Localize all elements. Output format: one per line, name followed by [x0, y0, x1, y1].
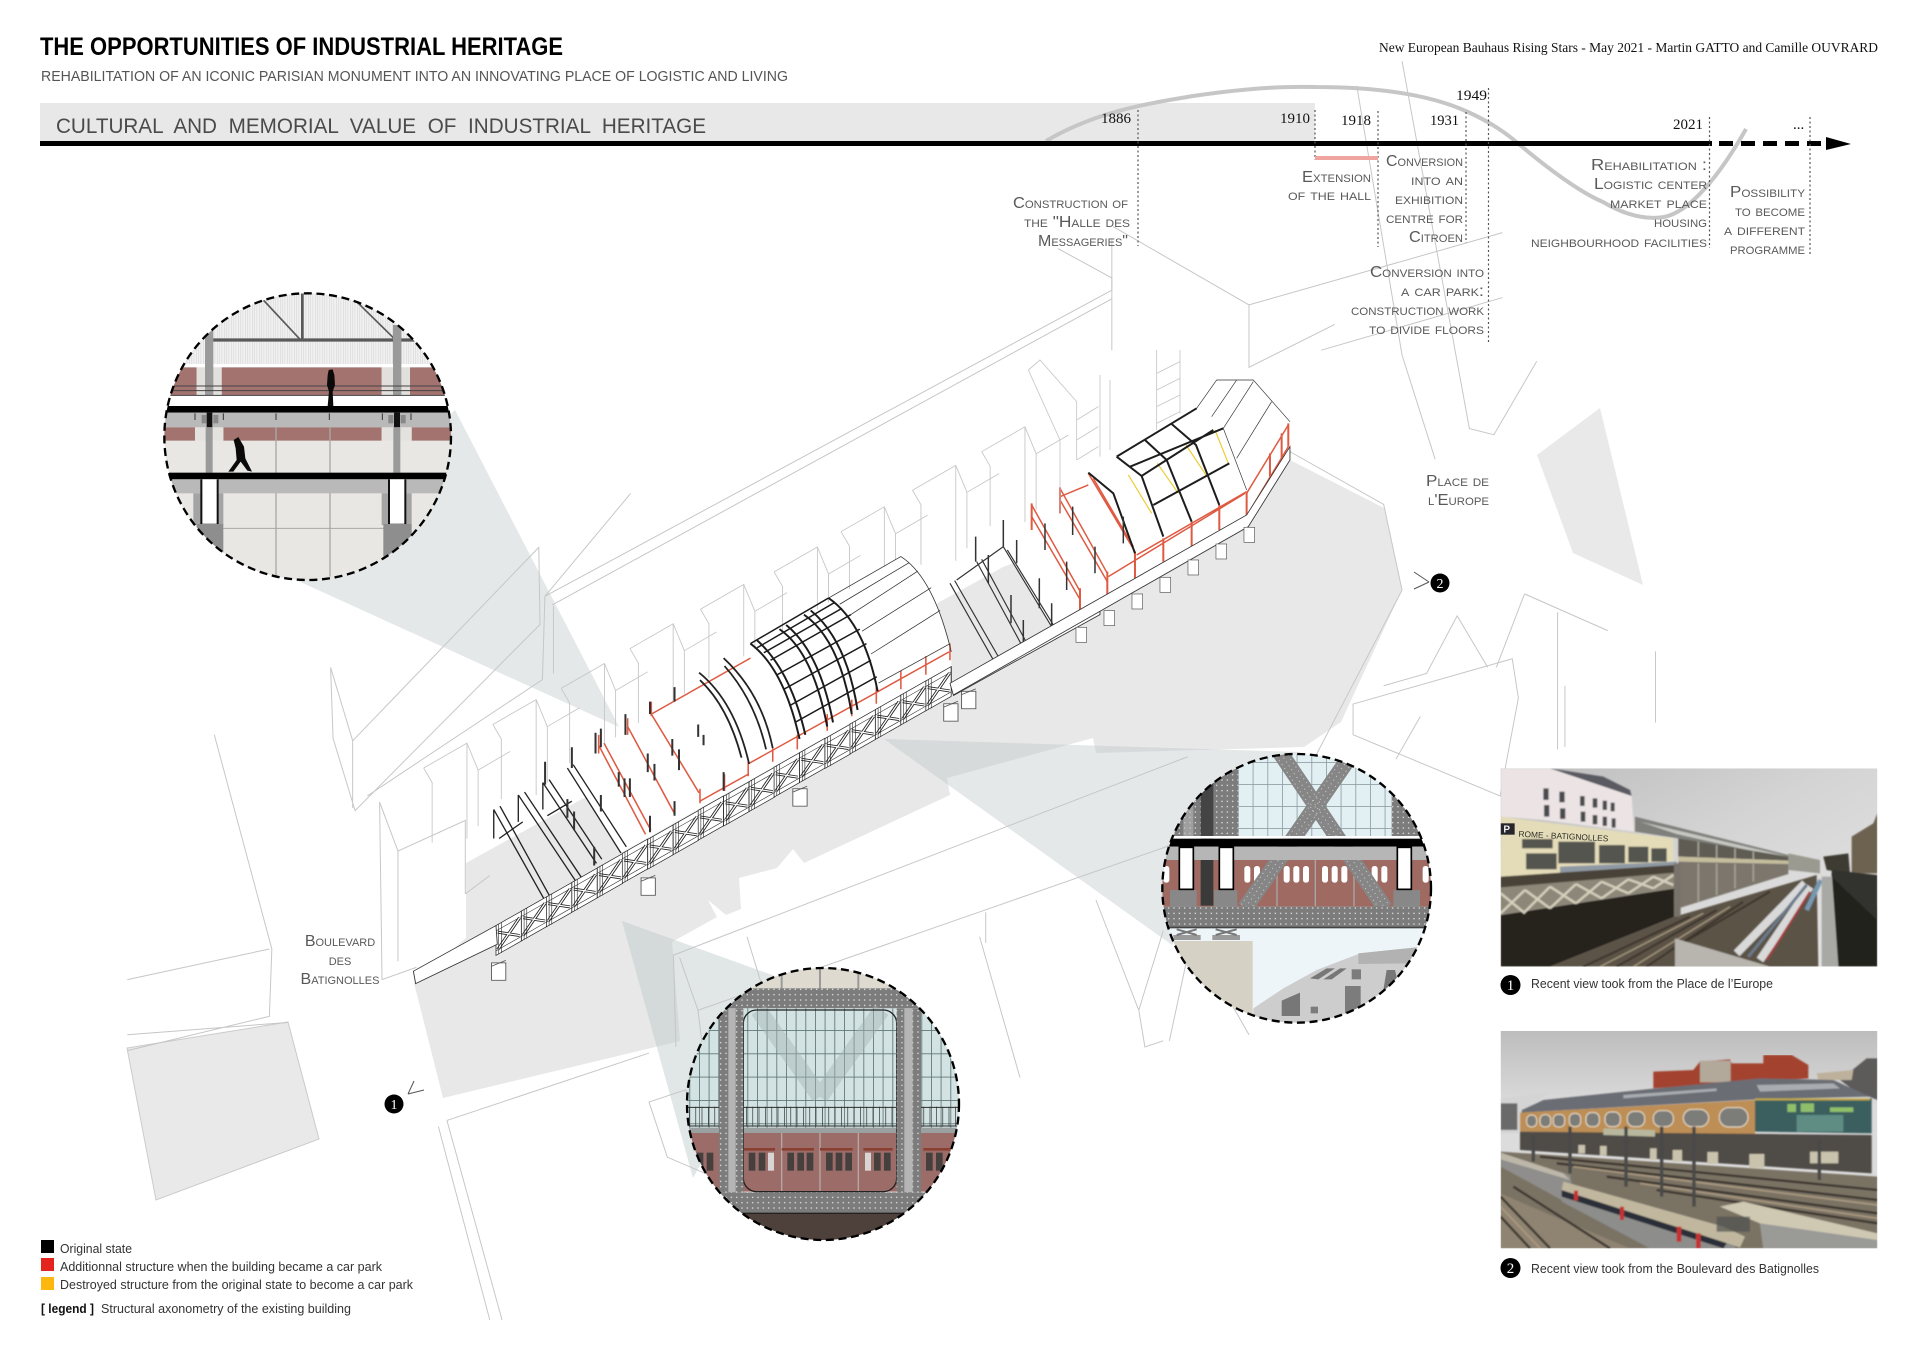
timeline note: rehabilitation: Rehabilitation : — [1591, 157, 1707, 174]
timeline years: 1910 — [1280, 111, 1310, 127]
legend: additional structure: Additionnal structure when the building became a car park — [60, 1260, 383, 1274]
timeline note: future — [1724, 184, 1806, 258]
train — [1253, 947, 1418, 1023]
original black frames — [1088, 408, 1229, 553]
rounded opening — [743, 1010, 897, 1192]
walking figure — [228, 437, 252, 472]
timeline heading: CULTURAL AND MEMORIAL VALUE OF INDUSTRIAL HERITAGE — [56, 115, 706, 138]
timeline note: exhibition centre: centre for — [1386, 210, 1463, 227]
arched windows — [1163, 866, 1429, 883]
brick base — [683, 1133, 963, 1192]
timeline note: car park: construction work — [1351, 302, 1485, 319]
timeline note: car park: to divide floors — [1369, 321, 1484, 338]
legend: caption: Structural axonometry of the existing building — [101, 1302, 351, 1316]
single arches — [699, 658, 773, 764]
roof truss — [213, 338, 415, 342]
timeline note: rehabilitation: Logistic center — [1594, 176, 1707, 193]
place label: Boulevard des Batignolles: Boulevard — [305, 933, 375, 950]
place label: Place de l'Europe: l'Europe — [1428, 492, 1489, 509]
left structure — [1501, 1092, 1550, 1133]
balustrade — [163, 386, 453, 395]
upper slab — [160, 406, 457, 413]
header: subtitle: REHABILITATION OF AN ICONIC PARISIAN MONUMENT INTO AN INNOVATING PLACE OF LOGISTIC AND LIVING — [41, 68, 788, 85]
main train — [1501, 1153, 1572, 1200]
legend — [41, 1240, 414, 1316]
piers — [1076, 527, 1255, 642]
timeline band — [40, 103, 1315, 141]
legend: caption: [ legend ] — [41, 1302, 94, 1316]
timeline note: future: a different — [1724, 222, 1805, 239]
viewpoint marker 2: 2 — [1436, 577, 1444, 592]
riveted girder — [1160, 907, 1433, 927]
deck — [950, 447, 1290, 695]
viewpoint marker 1 — [384, 1081, 424, 1114]
timeline note: rehabilitation — [1531, 157, 1707, 251]
timber truss panels along track edge — [496, 667, 951, 955]
timeline years — [1101, 88, 1804, 133]
deck end and piers — [413, 603, 1100, 984]
floor slab — [1160, 836, 1433, 839]
place label: Place de l'Europe — [1426, 473, 1489, 509]
timeline note: extension: of the hall — [1288, 187, 1371, 204]
dark base — [1501, 888, 1675, 967]
tracks — [1550, 875, 1818, 967]
glazed end — [1755, 1098, 1872, 1133]
right-side buildings — [1852, 813, 1877, 873]
lower truss level — [1520, 1132, 1872, 1173]
barrel roof thin lines — [829, 557, 951, 683]
photo 2 caption — [1500, 1258, 1819, 1278]
open bay frames — [950, 547, 1053, 660]
adjoining building row — [424, 427, 1068, 843]
timeline note: future: to become — [1735, 203, 1805, 220]
plot left of boulevard — [127, 1022, 319, 1200]
timeline date markers — [1138, 88, 1810, 342]
hall glazing — [1678, 838, 1788, 861]
photo 1: view from the Place de l'Europe — [1501, 768, 1877, 967]
viewpoint marker 1: 1 — [390, 1098, 398, 1113]
timeline note: construction: the "Halle des — [1024, 214, 1130, 231]
end bay frames — [494, 765, 626, 905]
legend: destroyed structure: Destroyed structure from the original state to become a car park — [60, 1278, 414, 1292]
detail circle: side section over tracks — [1157, 747, 1437, 1030]
timeline note: rehabilitation: market place — [1610, 195, 1707, 212]
site plan ground — [414, 460, 1402, 1098]
legend: original state — [41, 1240, 132, 1256]
axonometry: eastern hall — [950, 350, 1290, 695]
header: main title: THE OPPORTUNITIES OF INDUSTRIAL HERITAGE — [40, 33, 563, 61]
surrounding city outlines — [127, 61, 1656, 1320]
place label: Boulevard des Batignolles — [301, 933, 379, 988]
zoom cone: interior section — [285, 410, 619, 727]
upper-storey stairs of neighbouring block — [1028, 350, 1180, 513]
parking sign — [1501, 823, 1515, 835]
detail circle: front elevation — [683, 967, 963, 1244]
photo 1 caption: Recent view took from the Place de l’Europe — [1531, 977, 1773, 991]
dense steel arches — [750, 598, 878, 739]
timeline note: rehabilitation: neighbourhood facilities — [1531, 234, 1707, 251]
timeline note: exhibition centre: into an — [1411, 172, 1463, 189]
lower slab — [160, 473, 457, 479]
red additions — [1032, 423, 1288, 612]
lower brick — [160, 427, 457, 441]
timeline note: exhibition centre: Citroen — [1409, 229, 1463, 246]
railing — [683, 1107, 963, 1127]
viewpoint marker 2 — [1414, 572, 1450, 592]
upper brick — [160, 367, 457, 395]
timeline years: ... — [1793, 117, 1804, 133]
timeline note: car park — [1351, 264, 1485, 338]
timeline years: 1931 — [1430, 113, 1459, 129]
lower concrete span — [1675, 938, 1770, 967]
timeline years: 1886 — [1101, 111, 1132, 127]
concrete abutment — [1174, 941, 1253, 1014]
trains — [1737, 883, 1810, 960]
timeline note: future: Possibility — [1730, 184, 1806, 201]
orange façade — [1520, 1100, 1755, 1135]
glazing — [683, 1008, 963, 1128]
timeline years: 2021 — [1673, 117, 1703, 133]
timeline note: extension: Extension — [1302, 169, 1371, 186]
apartment block — [1501, 768, 1634, 832]
hall surface — [1003, 380, 1290, 627]
X bracing — [1245, 750, 1385, 908]
photo 1 caption: 1 — [1507, 978, 1514, 994]
tracks — [1501, 1152, 1877, 1248]
standing figure — [327, 369, 335, 406]
timeline note: exhibition centre: Conversion — [1386, 153, 1463, 170]
plot right of Place de l'Europe — [1537, 408, 1643, 585]
vertical posts — [545, 687, 724, 865]
additional red structure — [599, 644, 950, 834]
brick wall — [1160, 860, 1433, 907]
photo 2 caption: 2 — [1507, 1261, 1514, 1277]
extension period bar — [1315, 156, 1378, 160]
timeline years: 1918 — [1341, 113, 1371, 129]
photo 2: view from the Boulevard des Batignolles — [1501, 1031, 1877, 1248]
place label: Place de l'Europe: Place de — [1426, 473, 1489, 490]
timeline note: construction: Messageries" — [1038, 233, 1128, 250]
timeline note: car park: a car park: — [1401, 283, 1484, 300]
timeline note: future: programme — [1730, 241, 1805, 258]
timeline years: 1949 — [1456, 88, 1487, 104]
axonometry: western hall and truss — [413, 427, 1100, 984]
place label: Boulevard des Batignolles: des — [329, 952, 351, 969]
bottom girder — [720, 1192, 926, 1213]
yellow removed structure — [1102, 430, 1228, 530]
bearings — [1173, 935, 1240, 940]
red brick buildings behind — [1653, 1055, 1808, 1088]
timeline note: construction — [1013, 195, 1130, 250]
poles — [1533, 1127, 1819, 1207]
timeline note: exhibition centre — [1386, 153, 1463, 246]
detail circle: interior section — [160, 290, 457, 583]
photo 1: view from the Place de l'Europe: P — [1503, 825, 1510, 836]
legend: original state: Original state — [60, 1242, 132, 1256]
header: credit: New European Bauhaus Rising Stars - May 2021 - Martin GATTO and Camille OUVRARD — [1379, 41, 1878, 56]
end roof thin lines — [1197, 380, 1290, 490]
photo 2 caption: Recent view took from the Boulevard des Batignolles — [1531, 1262, 1819, 1276]
timeline note: car park: Conversion into — [1370, 264, 1484, 281]
zoom cone: front elevation — [622, 921, 800, 1178]
timeline note: rehabilitation: housing — [1654, 214, 1707, 231]
timeline note: extension — [1288, 169, 1371, 204]
zoom cone: side section — [884, 739, 1300, 945]
car park upper storey — [1501, 817, 1673, 877]
photo 1 caption — [1500, 975, 1773, 995]
large zinc roof — [1522, 1078, 1870, 1113]
photo 1: view from the Place de l'Europe: ROME - BATIGNOLLES — [1518, 829, 1609, 843]
hall floor and roof surfaces — [567, 557, 951, 853]
timeline note: exhibition centre: exhibition — [1395, 191, 1463, 208]
truss bridge — [1501, 872, 1675, 915]
second train — [1720, 1202, 1877, 1248]
timeline note: construction: Construction of — [1013, 195, 1128, 212]
path and retaining wall — [1822, 877, 1838, 967]
timeline axis — [40, 137, 1851, 150]
pillars — [719, 1008, 743, 1192]
long hall roof — [1635, 817, 1788, 862]
windows — [697, 1153, 943, 1171]
place label: Boulevard des Batignolles: Batignolles — [301, 971, 379, 988]
posts — [976, 507, 1123, 645]
value curve — [1046, 87, 1746, 218]
